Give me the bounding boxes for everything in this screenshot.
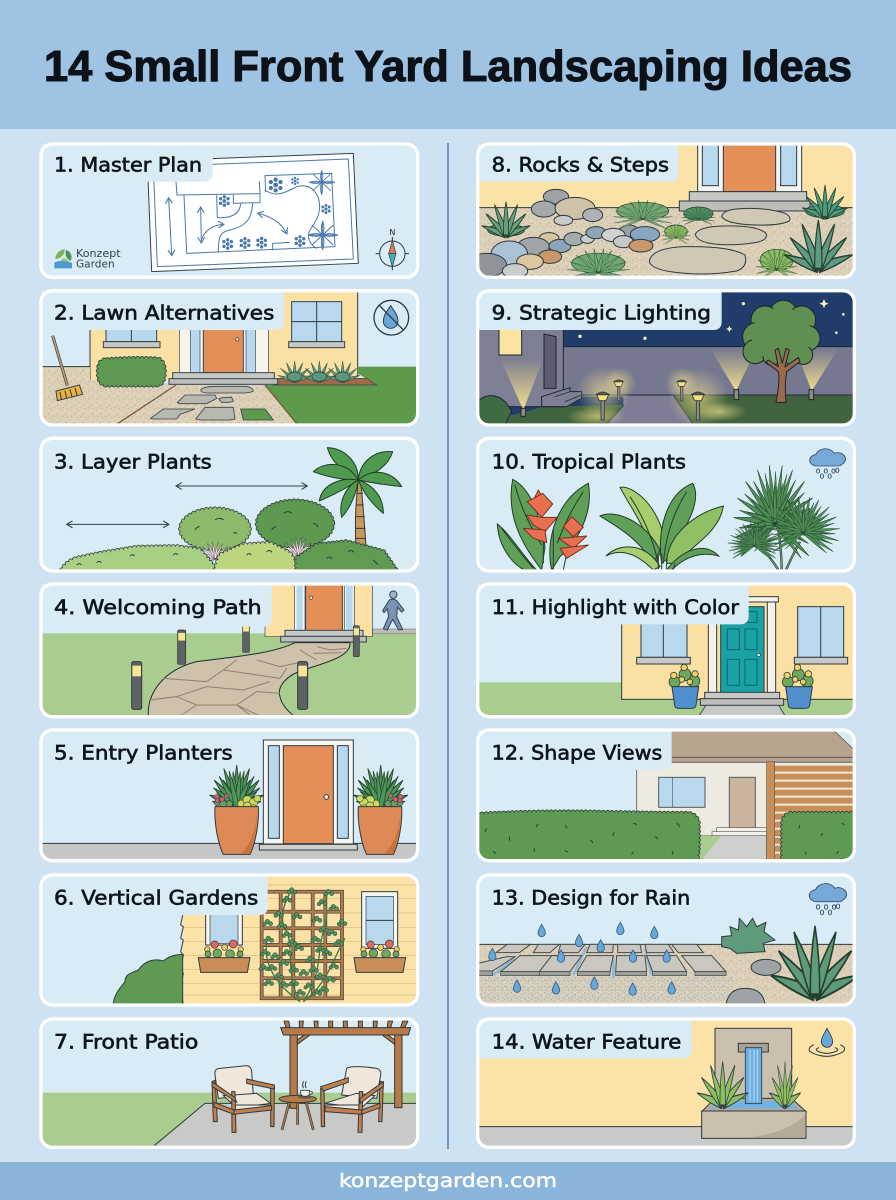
- illustration: house behind hedge and privacy screen: [478, 730, 857, 862]
- illustration: wall fountain: [478, 1028, 854, 1148]
- label tab: [478, 730, 672, 770]
- heading: 14. Water Feature: 14. Water Feature: [492, 1030, 681, 1053]
- illustration: siding wall with trellis and window boxes: [113, 875, 418, 1005]
- illustration: permeable pavers with rain drops: [478, 918, 861, 1006]
- footer URL: konzeptgarden.com: [339, 1170, 557, 1192]
- icon: compass: N: [389, 228, 395, 237]
- icon: broom: [53, 336, 83, 401]
- heading: 11. Highlight with Color: 11. Highlight with Color: [492, 596, 740, 619]
- illustration: night scene with landscape lights: [478, 299, 854, 428]
- panel: 9. Strategic Lighting: [478, 291, 854, 428]
- panel: 6. Vertical Gardens: [41, 875, 418, 1005]
- panel: 11. Highlight with Color: [478, 584, 855, 717]
- heading: 6. Vertical Gardens: 6. Vertical Gardens: [54, 886, 258, 909]
- illustration: house with teal door: [478, 584, 855, 717]
- logo: Konzept Garden: Konzept: [76, 248, 121, 260]
- illustration: pergola with chairs and table: [41, 1021, 418, 1149]
- label tab: [478, 144, 678, 182]
- panel: 4. Welcoming Path: [41, 584, 418, 717]
- illustration: layered shrubs and palm: [62, 448, 402, 570]
- illustration: tropical plants: [497, 464, 840, 572]
- illustration: house with gravel and stepping stones: [41, 291, 418, 425]
- heading: 12. Shape Views: 12. Shape Views: [492, 741, 662, 764]
- heading: 4. Welcoming Path: 4. Welcoming Path: [54, 596, 262, 619]
- icon: water drop with ripples: [809, 1028, 845, 1056]
- label tab: [41, 291, 284, 330]
- header band: [0, 0, 896, 129]
- label tab: [41, 144, 213, 182]
- heading: 13. Design for Rain: 13. Design for Rain: [492, 886, 690, 909]
- footer band: [0, 1162, 896, 1200]
- icon: rain cloud: [809, 884, 847, 915]
- illustration: site plan blueprint: [147, 153, 358, 272]
- panel: 5. Entry Planters: [41, 730, 418, 862]
- heading: 7. Front Patio: 7. Front Patio: [54, 1030, 198, 1053]
- heading: 10. Tropical Plants: 10. Tropical Plants: [492, 450, 686, 473]
- panel: 8. Rocks & Steps: [467, 144, 854, 286]
- column divider: [447, 143, 449, 1149]
- icon: no water: [374, 300, 409, 335]
- illustration: door flanked by planters: [41, 740, 418, 862]
- table with cup: [279, 1082, 316, 1130]
- label tab: [41, 584, 272, 627]
- panel: 14. Water Feature: [478, 1019, 854, 1148]
- icon: compass: [376, 228, 409, 270]
- label tab: [478, 584, 749, 624]
- icon: walking person: [383, 591, 404, 630]
- illustration: stone path with bollard lights: [41, 584, 418, 717]
- label tab: [478, 291, 722, 330]
- heading: 9. Strategic Lighting: 9. Strategic Lighting: [492, 301, 711, 324]
- heading: 8. Rocks & Steps: 8. Rocks & Steps: [492, 154, 669, 177]
- title: 14 Small Front Yard Landscaping Ideas: [44, 42, 852, 91]
- logo: Konzept Garden: [54, 248, 121, 270]
- panel: 13. Design for Rain: [478, 875, 861, 1006]
- heading: 2. Lawn Alternatives: 2. Lawn Alternatives: [54, 301, 274, 324]
- panel: 3. Layer Plants: [41, 438, 418, 571]
- logo: Konzept Garden: Garden: [76, 258, 115, 270]
- heading: 1. Master Plan: 1. Master Plan: [54, 154, 202, 177]
- label tab: [478, 1019, 692, 1058]
- heading: 5. Entry Planters: 5. Entry Planters: [54, 741, 233, 764]
- heading: 3. Layer Plants: 3. Layer Plants: [54, 450, 212, 473]
- label tab: [41, 875, 268, 915]
- panel: 2. Lawn Alternatives: [41, 291, 418, 425]
- panel: 7. Front Patio: [41, 1019, 418, 1149]
- panel: 1. Master Plan: [41, 144, 418, 277]
- panel: 12. Shape Views: [478, 730, 857, 862]
- panel: 10. Tropical Plants: [478, 438, 854, 572]
- icon: rain cloud: [810, 449, 845, 478]
- illustration: rock garden with stepping stones: [479, 146, 853, 276]
